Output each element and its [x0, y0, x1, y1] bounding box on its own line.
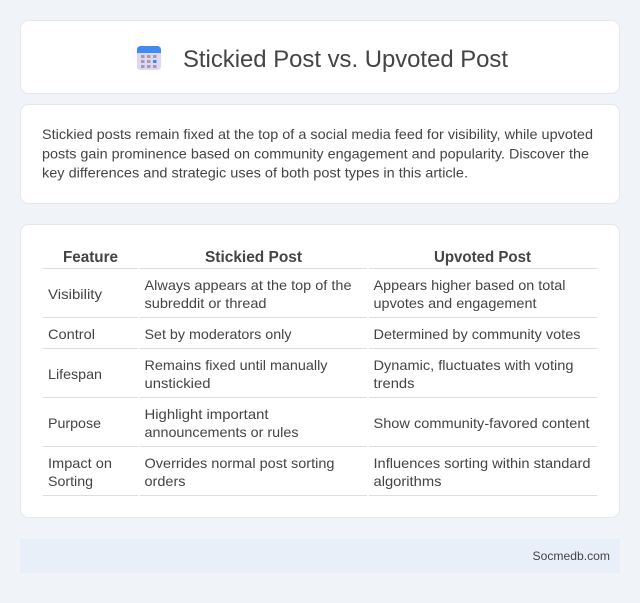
intro text: posts gain prominence based on community engagement and popularity. Discover the — [42, 146, 589, 162]
row: lifespan: Lifespan — [48, 366, 102, 382]
row: impact on sorting: algorithms — [374, 473, 442, 489]
row: purpose: Purpose — [48, 415, 101, 431]
intro text: key differences and strategic uses of both post types in this article. — [42, 164, 468, 180]
row: control: Set by moderators only — [144, 326, 292, 342]
row: purpose: announcements or rules — [144, 424, 298, 440]
intro text: Stickied posts remain fixed at the top of a social media feed for visibility, while upvoted — [42, 126, 593, 142]
comparison table panel — [20, 224, 620, 518]
row: lifespan — [48, 357, 574, 391]
row: lifespan: trends — [374, 375, 414, 391]
row: purpose: Highlight important — [144, 406, 269, 422]
row: lifespan: Remains fixed until manually — [144, 357, 328, 373]
row: purpose: Show community-favored content — [374, 415, 590, 431]
row: visibility — [48, 277, 566, 311]
title panel — [20, 20, 620, 94]
row: impact on sorting — [48, 455, 590, 489]
row: control: Determined by community votes — [374, 326, 580, 342]
row: visibility: subreddit or thread — [144, 295, 266, 311]
table header: Upvoted Post — [434, 249, 532, 266]
row: control: Control — [48, 326, 95, 342]
intro text — [42, 126, 593, 180]
row: impact on sorting: Sorting — [48, 473, 93, 489]
table header: Feature — [63, 249, 118, 266]
row: impact on sorting: Impact on — [48, 455, 112, 471]
row: visibility: Appears higher based on total — [374, 277, 566, 293]
title: Stickied Post vs. Upvoted Post — [183, 46, 508, 73]
row: purpose — [48, 406, 590, 440]
row: impact on sorting: Overrides normal post sorting — [144, 455, 334, 471]
row: control — [48, 326, 580, 342]
footer bar — [20, 539, 620, 573]
row: lifespan: unstickied — [144, 375, 210, 391]
row: impact on sorting: orders — [144, 473, 186, 489]
row: visibility: Always appears at the top of the — [144, 277, 352, 293]
row: lifespan: Dynamic, fluctuates with voting — [374, 357, 574, 373]
intro panel — [20, 104, 620, 204]
row: visibility: upvotes and engagement — [374, 295, 537, 311]
footer credit: Socmedb.com — [532, 549, 610, 563]
table header: Stickied Post — [205, 249, 303, 266]
table header — [63, 249, 532, 266]
row: impact on sorting: Influences sorting within standard — [374, 455, 590, 471]
row: visibility: Visibility — [48, 286, 102, 302]
icon: calendar — [137, 46, 161, 70]
